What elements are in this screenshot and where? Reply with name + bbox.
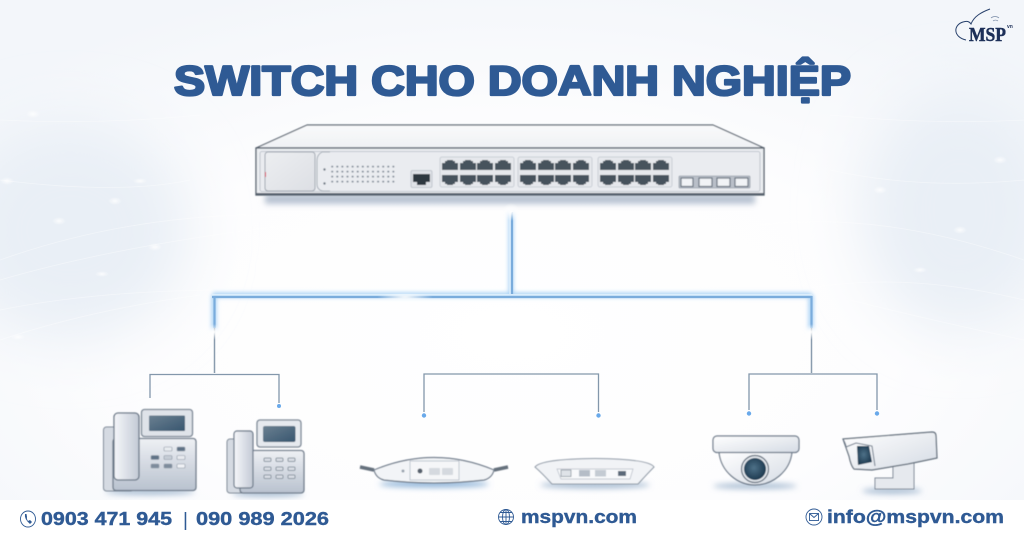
console port: [411, 170, 432, 188]
SFP ports: [679, 176, 750, 188]
access point branch: [422, 374, 601, 418]
icon: globe: [498, 510, 514, 524]
switch shadow: [265, 194, 755, 204]
ethernet port group 3: [598, 157, 672, 187]
logo: MSP cloud: [956, 9, 1013, 46]
camera branch: [747, 374, 879, 416]
switch front face: [256, 148, 764, 195]
logo: MSP cloud: MSP: [969, 24, 1006, 46]
phone branch: [150, 374, 281, 408]
title: SWITCH CHO DOANH NGHIỆP: [174, 56, 851, 104]
phone numbers: 090 989 2026: [196, 509, 329, 529]
website: mspvn.com: [521, 507, 637, 527]
network switch: [256, 125, 764, 204]
glow nodes: [206, 203, 819, 340]
phone numbers: |: [183, 510, 188, 531]
icon: desk phone large: [104, 410, 196, 495]
icon: bullet camera: [843, 432, 937, 494]
ethernet port group 1: [440, 157, 514, 187]
logo: MSP cloud: vn: [1007, 24, 1013, 30]
icon: envelope: [806, 509, 822, 525]
line glow: [213, 212, 811, 330]
trunk lines: [212, 212, 812, 328]
icon: ceiling access point: [535, 458, 654, 488]
switch top face: [256, 125, 764, 148]
drop lines: [214, 326, 812, 373]
footer bar: [0, 500, 1024, 538]
email: info@mspvn.com: [827, 507, 1004, 527]
phone numbers: [41, 509, 329, 531]
icon: access point with antennas: [360, 458, 508, 488]
left blank panel: [265, 152, 315, 191]
phone numbers: 0903 471 945: [41, 509, 172, 529]
connection tree: [150, 203, 879, 418]
icon: desk phone small: [227, 420, 304, 497]
ventilation panel: [317, 152, 395, 191]
ethernet port group 2: [518, 157, 592, 187]
icon: dome camera: [713, 436, 799, 489]
icon: phone: [20, 511, 36, 527]
